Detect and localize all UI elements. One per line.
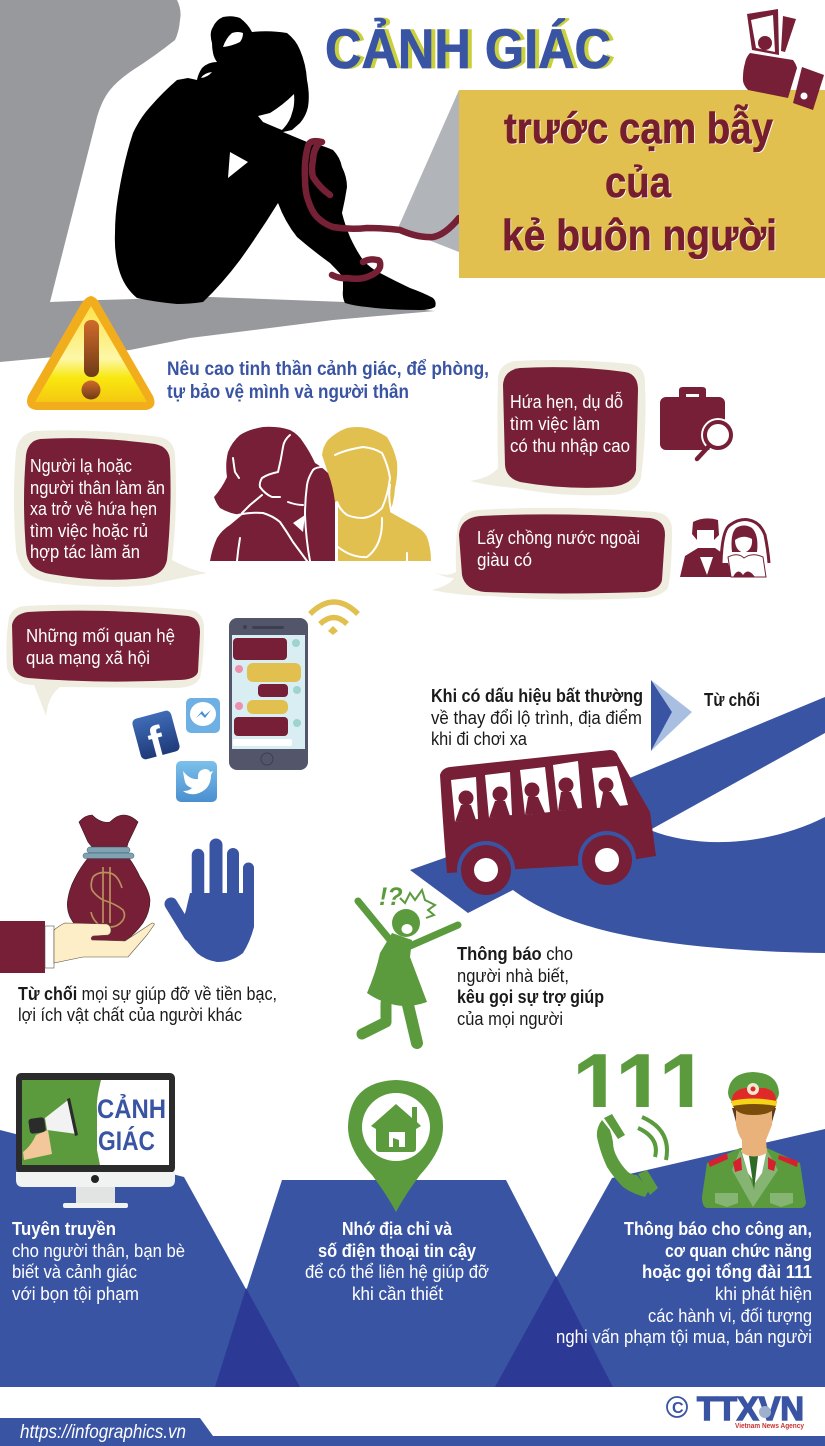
text: column spread awareness: Tuyên truyền: [12, 1218, 116, 1239]
speech bubble: social networks: Những mối quan hệ: [26, 625, 175, 646]
illustration: green woman screaming: [358, 883, 458, 1043]
text: notify family: Thông báo cho: [457, 943, 573, 964]
icon: monitor with megaphone: [16, 1073, 175, 1208]
background: light grey wall wedge: [398, 90, 459, 252]
text: vigilance message: tự bảo vệ mình và người thân: [167, 382, 409, 403]
text: refuse financial help: Từ chối mọi sự giúp đỡ về tiền bạc,: [18, 983, 277, 1004]
text: vigilance message: [167, 359, 489, 403]
heading panel: trước cạm bẫy của kẻ buôn người: [459, 90, 825, 278]
illustration: rope around the girl's legs: [305, 141, 459, 279]
speech bubble: job promise: [470, 360, 646, 495]
logo: TTXVN: Vietnam News Agency: [735, 1421, 805, 1430]
text: column remember contacts: để có thể liên hệ giúp đỡ: [305, 1261, 489, 1282]
heading panel: trước cạm bẫy của kẻ buôn người: trước cạm bẫy: [504, 103, 773, 153]
icon: wifi signal: [310, 602, 358, 635]
text: vigilance message: Nêu cao tinh thần cảnh giác, để phòng,: [167, 359, 489, 380]
text: column spread awareness: cho người thân, bạn bè: [12, 1240, 185, 1261]
text: column report to police: hoặc gọi tổng đài 111: [642, 1261, 812, 1282]
text: column report to police: [556, 1218, 812, 1347]
background: grey wall and floor: [0, 0, 435, 362]
number: 111 hotline: 111: [572, 1036, 709, 1137]
footer band with website: [0, 1418, 825, 1446]
text: abnormal route signs: [431, 685, 643, 749]
panel: bottom blue shapes: [0, 1129, 825, 1387]
icon: Facebook: [131, 710, 184, 771]
text: refuse financial help: [18, 983, 277, 1025]
text: abnormal route signs: về thay đổi lộ trình, địa điểm: [431, 707, 642, 728]
text: column spread awareness: biết và cảnh giác: [12, 1261, 137, 1282]
logo: TTXVN: TTXVN: [697, 1390, 804, 1427]
icon: monitor with megaphone: GIÁC: [98, 1125, 155, 1156]
illustration: seated girl silhouette: [115, 16, 436, 310]
text: refuse financial help: lợi ích vật chất của người khác: [18, 1004, 242, 1025]
speech bubble: strangers or returning relatives: Người lạ hoặc: [30, 455, 132, 476]
icon: hand holding cash: [743, 9, 824, 110]
arrow: chevron to refuse: [651, 680, 692, 751]
text: abnormal route signs: khi đi chơi xa: [431, 728, 528, 749]
text: column report to police: khi phát hiện: [715, 1283, 812, 1304]
speech bubble: strangers or returning relatives: người thân làm ăn: [30, 477, 165, 498]
heading panel: trước cạm bẫy của kẻ buôn người: kẻ buôn người: [503, 212, 778, 261]
icon: monitor with megaphone: CẢNH: [97, 1092, 166, 1124]
text: notify family: kêu gọi sự trợ giúp: [457, 986, 604, 1007]
text: column remember contacts: [305, 1218, 489, 1304]
speech bubble: social networks: qua mạng xã hội: [26, 647, 150, 668]
footer band with website: https://infographics.vn: [20, 1422, 186, 1443]
icon: Facebook: f: [143, 717, 170, 768]
icon: briefcase with magnifier: [660, 387, 735, 459]
text: column remember contacts: số điện thoại tin cậy: [318, 1240, 477, 1261]
icon: bride and groom: [680, 518, 769, 577]
speech bubble: social networks: [6, 605, 204, 716]
heading panel: trước cạm bẫy của kẻ buôn người: trước cạm bẫy: [505, 104, 774, 154]
text: column spread awareness: với bọn tội phạm: [12, 1283, 139, 1304]
icon: Messenger: [186, 698, 220, 733]
speech bubble: job promise: tìm việc làm: [510, 413, 600, 434]
text: refuse: Từ chối: [704, 689, 760, 710]
speech bubble: strangers or returning relatives: tìm việc hoặc rủ: [30, 520, 148, 541]
illustration: police officer: [702, 1072, 806, 1208]
text: notify family: [457, 943, 604, 1029]
text: column remember contacts: khi cần thiết: [352, 1283, 443, 1304]
logo: TTXVN: C: [672, 1400, 684, 1417]
illustration: smartphone with chat: [229, 618, 308, 770]
icon: Twitter: [176, 761, 217, 802]
illustration: money bag on an open hand: [0, 815, 154, 973]
speech bubble: foreign husband: [432, 508, 672, 600]
speech bubble: job promise: Hứa hẹn, dụ dỗ: [510, 391, 623, 412]
speech bubble: foreign husband: giàu có: [477, 549, 532, 570]
speech bubble: strangers or returning relatives: xa trở về hứa hẹn: [30, 498, 157, 519]
icon: location pin with house: [348, 1080, 443, 1212]
icon: blue stop hand: [171, 845, 254, 962]
title: CẢNH GIÁC: CẢNH GIÁC: [329, 17, 615, 80]
illustration: two people whispering: [210, 427, 431, 561]
text: column remember contacts: Nhớ địa chỉ và: [342, 1218, 453, 1239]
heading panel: trước cạm bẫy của kẻ buôn người: của: [605, 158, 671, 207]
road: blue swoosh: [410, 697, 825, 953]
illustration: green woman screaming: !?: [379, 883, 403, 911]
text: column spread awareness: [12, 1218, 185, 1304]
heading panel: trước cạm bẫy của kẻ buôn người: kẻ buôn người: [502, 211, 777, 260]
icon: warning triangle: [27, 296, 154, 410]
speech bubble: strangers or returning relatives: hợp tác làm ăn: [30, 541, 140, 562]
text: abnormal route signs: Khi có dấu hiệu bất thường: [431, 685, 643, 706]
speech bubble: job promise: có thu nhập cao: [510, 435, 630, 456]
speech bubble: strangers or returning relatives: [14, 430, 207, 587]
text: notify family: người nhà biết,: [457, 965, 569, 986]
title: CẢNH GIÁC: CẢNH GIÁC: [325, 17, 611, 80]
illustration: bus: [440, 750, 656, 899]
text: notify family: của mọi người: [457, 1008, 563, 1029]
heading panel: trước cạm bẫy của kẻ buôn người: của: [606, 159, 672, 208]
icon: telephone handset: [597, 1114, 667, 1197]
speech bubble: foreign husband: Lấy chồng nước ngoài: [477, 527, 640, 548]
